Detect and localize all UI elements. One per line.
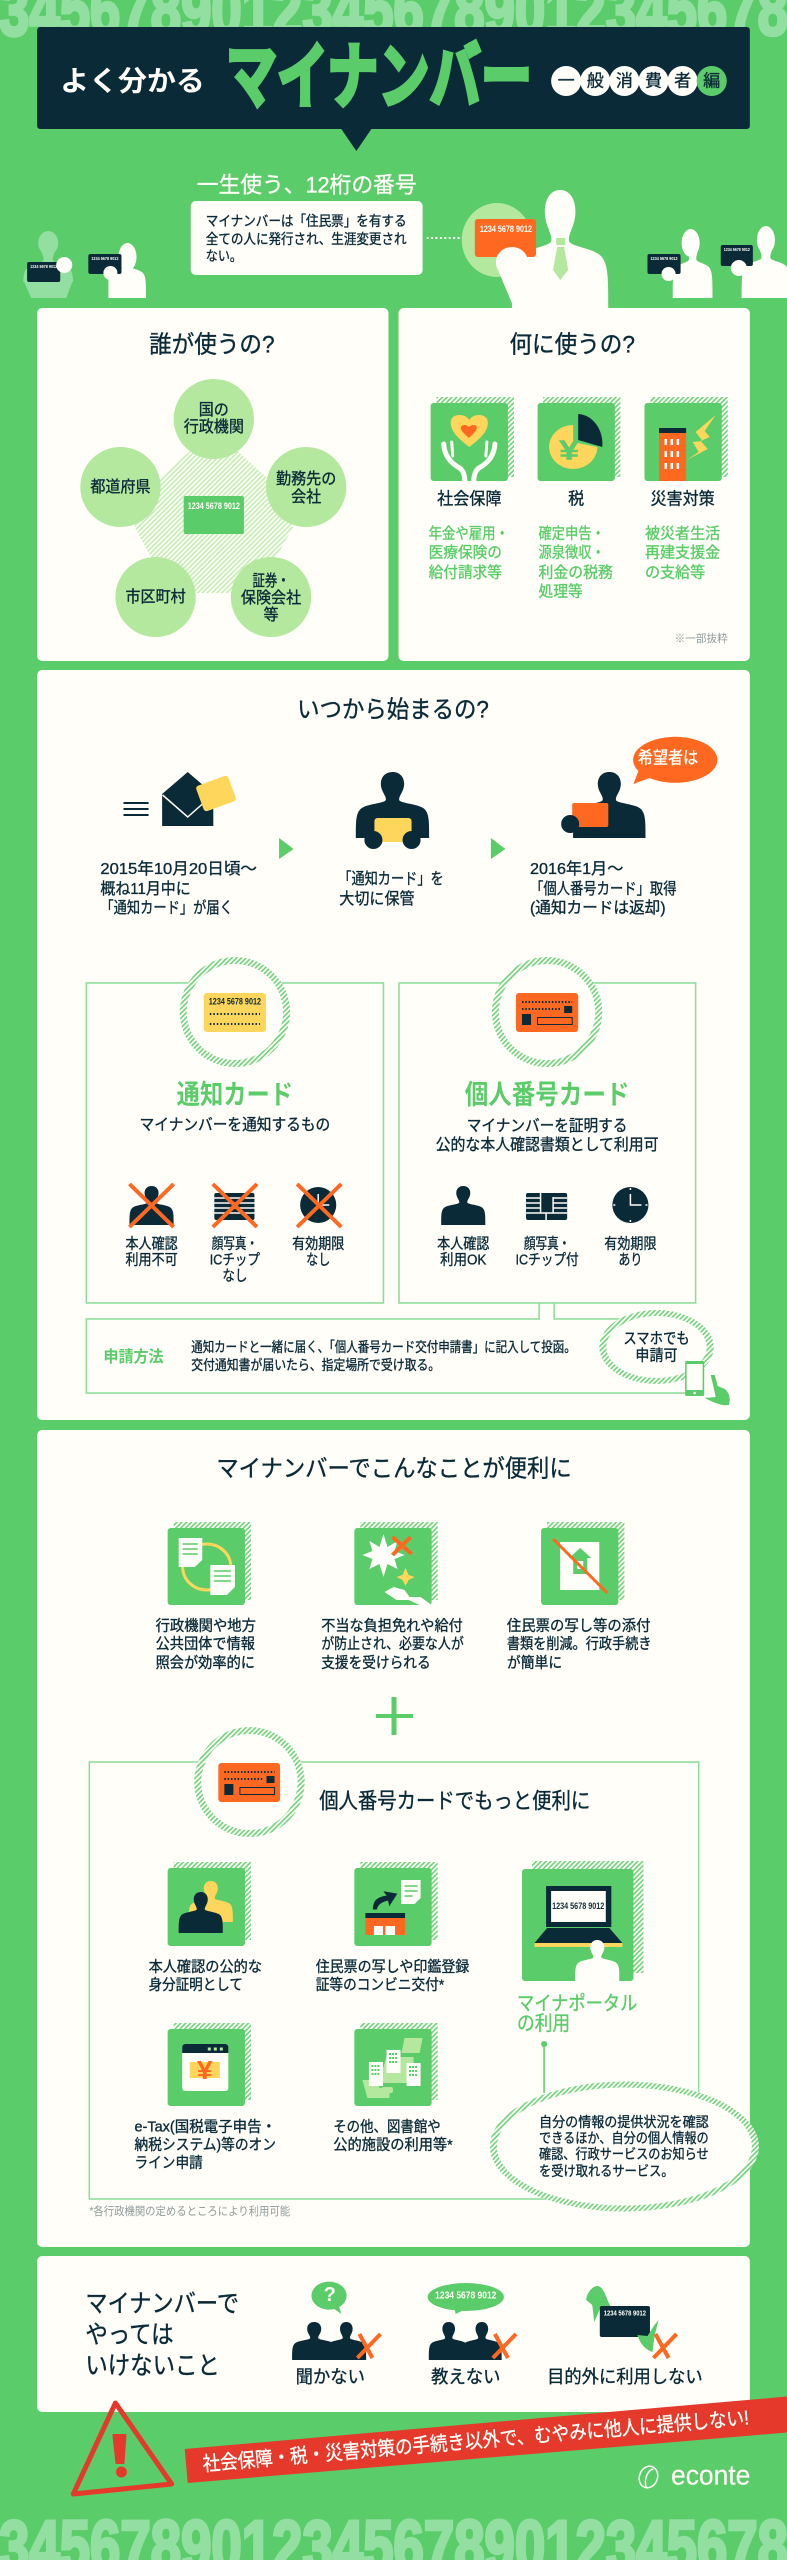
callout: smartphone: 申請可	[635, 1347, 678, 1364]
step 1 text: 概ね11月中に	[100, 880, 191, 898]
person right 1: 1234 5678 9012	[650, 256, 678, 262]
text: identity proof: 身分証明として	[149, 1977, 243, 1993]
callout: portal explanation: できるほか、自分の個人情報の	[539, 2130, 709, 2146]
heading: my number card: 個人番号カード	[465, 1080, 629, 1110]
labels: my number card features: ICチップ付	[515, 1252, 579, 1268]
panel: what for	[399, 308, 750, 661]
labels: notification card features: 利用不可	[125, 1252, 178, 1268]
text: identity proof	[149, 1959, 262, 1993]
labels: notification card features	[125, 1236, 344, 1284]
icon: tax	[538, 397, 620, 481]
icon: do not misuse: 1234 5678 9012	[604, 2311, 646, 2317]
panel: my number card	[399, 957, 696, 1303]
circle: national agencies	[174, 379, 254, 459]
icon: do not tell: 1234 5678 9012	[435, 2291, 497, 2301]
heading: when: いつから始まるの?	[297, 697, 489, 723]
circle: national agencies: 国の	[199, 401, 229, 419]
heading: portal	[517, 1992, 637, 2035]
text: benefit 3: が簡単に	[507, 1654, 562, 1671]
circle: securities and insurance	[231, 557, 311, 637]
icon: convenience store	[354, 1862, 438, 1946]
step 3 text: 2016年1月〜	[530, 860, 623, 878]
icon: e-tax: ¥	[197, 2055, 213, 2085]
callout: portal explanation	[490, 2082, 759, 2212]
step 3 text: (通知カードは返却)	[530, 899, 666, 917]
labels: usage categories: 災害対策	[650, 490, 715, 508]
heading: portal: の利用	[517, 2012, 570, 2035]
labels: notification card features: なし	[222, 1268, 247, 1284]
icon: chip	[526, 1193, 567, 1220]
icon: identity	[441, 1186, 485, 1225]
text: benefit 2: が防止され、必要な人が	[321, 1636, 464, 1652]
circle: municipalities: 市区町村	[125, 588, 186, 606]
audience badges: 一	[558, 72, 575, 90]
heading: who uses: 誰が使うの?	[149, 332, 275, 358]
logo: econte: econte	[671, 2460, 750, 2490]
text: benefit 2: 支援を受けられる	[321, 1655, 431, 1671]
icon: orange card	[218, 1763, 280, 1802]
icon: no expiry	[297, 1184, 341, 1227]
text: benefit 2: 不当な負担免れや給付	[321, 1618, 463, 1634]
text: application method: 通知カードと一緒に届く、「個人番号カード交付申請書」に記入して投函。	[191, 1339, 576, 1355]
circle: employer: 会社	[291, 488, 321, 506]
center card	[184, 496, 244, 534]
logo: econte	[636, 2460, 750, 2490]
note: excerpt: ※一部抜粋	[675, 631, 728, 645]
labels: my number card features: 顔写真・	[524, 1236, 570, 1252]
step 2 text: 「通知カード」を	[338, 870, 444, 888]
footnote: *各行政機関の定めるところにより利用可能	[89, 2204, 291, 2218]
audience badges: 般	[587, 72, 604, 90]
title main text: マイナンバー	[226, 38, 532, 118]
icon: identity proof	[168, 1862, 251, 1946]
center card: 1234 5678 9012	[188, 501, 240, 511]
text: benefit 2	[321, 1618, 464, 1671]
text: library and facilities	[333, 2119, 453, 2153]
heading: do not	[85, 2290, 239, 2380]
text: my number card purpose	[436, 1117, 659, 1154]
panel: card benefits frame	[89, 1727, 759, 2212]
heading: benefits: マイナンバーでこんなことが便利に	[216, 1456, 572, 1482]
text: e-Tax	[135, 2119, 276, 2171]
text: benefit 1: 行政機関や地方	[156, 1618, 256, 1634]
person right 2	[721, 226, 787, 298]
text: application method	[191, 1339, 576, 1373]
speech bubble: applicants: 希望者は	[638, 749, 698, 767]
intro text box: ない。	[206, 248, 242, 264]
labels: notification card features: 顔写真・	[212, 1236, 258, 1252]
text: convenience store copies: 証等のコンビニ交付*	[316, 1976, 444, 1993]
panel: when does it start	[37, 670, 750, 1420]
arrow	[279, 838, 294, 859]
intro text box: 全ての人に発行され、生涯変更され	[206, 231, 407, 247]
labels: notification card features: 本人確認	[125, 1236, 178, 1252]
labels: usage categories: 社会保障	[437, 490, 501, 508]
icon: phone and hand	[685, 1361, 730, 1405]
heading: do not: いけないこと	[85, 2352, 220, 2380]
step 2 text: 大切に保管	[339, 890, 415, 908]
panel: application method	[86, 1303, 730, 1405]
text: disaster details: 被災者生活	[645, 525, 720, 542]
text: notification card purpose: マイナンバーを通知するもの	[140, 1116, 330, 1134]
callout: portal explanation: 自分の情報の提供状況を確認	[539, 2114, 709, 2130]
title lead text: よく分かる	[60, 66, 205, 96]
text: tax details: 確定申告・	[539, 525, 605, 542]
circle: securities and insurance: 証券・	[252, 572, 290, 590]
text: my number card purpose: 公的な本人確認書類として利用可	[436, 1136, 659, 1154]
panel: do not	[37, 2256, 750, 2412]
heading: portal: マイナポータル	[517, 1992, 637, 2015]
labels: notification card features: 有効期限	[292, 1236, 344, 1252]
label: do not tell: 教えない	[431, 2367, 500, 2387]
text: social security details: 年金や雇用・	[429, 525, 509, 542]
icon: person holding card	[356, 772, 429, 849]
text: tax details: 利金の税務	[539, 564, 613, 581]
text: e-Tax: e-Tax(国税電子申告・	[135, 2119, 276, 2135]
heading: do not: マイナンバーで	[85, 2290, 239, 2318]
text: social security details: 給付請求等	[429, 564, 502, 581]
intro text box: マイナンバーは「住民票」を有する	[206, 213, 407, 229]
circle: prefectures: 都道府県	[90, 478, 151, 496]
text: application method: 交付通知書が届いたら、指定場所で受け取る。	[191, 1357, 440, 1373]
hatched ring	[492, 957, 602, 1067]
label: do not misuse: 目的外に利用しない	[547, 2367, 703, 2387]
step 2 text	[338, 870, 444, 908]
text: disaster details: の支給等	[645, 564, 705, 581]
icon: social security	[431, 397, 514, 481]
person left	[88, 243, 146, 298]
label: do not ask: 聞かない	[296, 2367, 365, 2387]
panel: notification card	[86, 957, 383, 1303]
circle: securities and insurance: 等	[264, 606, 279, 624]
circle: municipalities	[115, 557, 196, 637]
text: convenience store copies: 住民票の写しや印鑑登録	[316, 1959, 469, 1975]
text: tax details: 源泉徴収・	[539, 544, 605, 561]
icon: yellow card: 1234 5678 9012	[209, 997, 261, 1007]
person right 1	[647, 229, 713, 298]
circle: employer	[266, 447, 346, 527]
icon: do not ask	[292, 2282, 380, 2360]
circle: prefectures	[80, 447, 161, 527]
text: benefit 3: 住民票の写し等の添付	[507, 1617, 650, 1634]
text: e-Tax: ライン申請	[135, 2155, 203, 2171]
icon: envelope	[123, 772, 237, 826]
text: e-Tax: 納税システム)等のオン	[135, 2136, 276, 2153]
labels: my number card features: 利用OK	[440, 1252, 486, 1268]
text: tax details	[539, 525, 613, 600]
labels: my number card features: あり	[618, 1252, 642, 1268]
speech bubble: applicants	[633, 737, 717, 784]
dotted connector	[427, 237, 473, 239]
text: my number card purpose: マイナンバーを証明する	[467, 1117, 627, 1135]
labels: usage categories: 税	[568, 490, 584, 508]
icon: portal laptop	[522, 1861, 643, 1981]
person left faded: 1234 5678 9012	[30, 264, 57, 270]
text: benefit 1	[156, 1618, 256, 1671]
person left faded	[20, 231, 76, 298]
intro heading: 一生使う、12桁の番号	[197, 173, 417, 197]
icon: clock	[612, 1187, 648, 1223]
hatched ring	[194, 1727, 305, 1837]
hatched pentagon	[135, 430, 293, 593]
labels: notification card features: ICチップ	[210, 1252, 260, 1268]
icon: portal laptop: 1234 5678 9012	[552, 1901, 604, 1911]
text: library and facilities: 公的施設の利用等*	[333, 2136, 453, 2153]
audience badges: 編	[703, 72, 720, 90]
heading: what for: 何に使うの?	[509, 332, 635, 358]
labels: my number card features: 本人確認	[437, 1236, 489, 1252]
text: benefit 1: 公共団体で情報	[156, 1636, 255, 1652]
icon: tax: ¥	[559, 435, 580, 465]
arrow	[491, 838, 505, 859]
callout: portal explanation: 確認、行政サービスのお知らせ	[539, 2146, 709, 2162]
text: social security details: 医療保険の	[429, 544, 502, 561]
labels: my number card features: 有効期限	[604, 1236, 657, 1252]
labels: my number card features	[437, 1236, 657, 1268]
text: benefit 1: 照会が効率的に	[156, 1655, 255, 1671]
icon: plus	[376, 1697, 413, 1735]
labels: notification card features: なし	[306, 1252, 330, 1268]
main person with card: 1234 5678 9012	[480, 224, 532, 234]
heading: do not: やっては	[85, 2321, 174, 2349]
icon: no identity	[129, 1184, 174, 1227]
text: social security details	[429, 525, 509, 581]
icon: yellow card	[204, 993, 266, 1032]
icon: public facilities	[354, 2023, 438, 2106]
icon: person with orange card	[561, 772, 646, 838]
text: identity proof: 本人確認の公的な	[149, 1959, 262, 1975]
text: benefit 3	[507, 1617, 651, 1671]
text: disaster details	[645, 525, 720, 581]
heading: notification card: 通知カード	[177, 1080, 293, 1110]
icon: do not misuse	[586, 2286, 677, 2358]
audience badges: 費	[645, 72, 662, 90]
circle: employer: 勤務先の	[276, 470, 336, 488]
panel: who uses	[37, 308, 388, 661]
main person with card	[462, 190, 608, 310]
icon: e-tax	[168, 2023, 251, 2106]
intro text box	[191, 201, 423, 275]
person right 2: 1234 5678 9012	[724, 247, 750, 253]
text: benefit 3: 書類を削減。行政手続き	[507, 1636, 651, 1652]
icon: orange card	[516, 993, 578, 1032]
circle: securities and insurance: 保険会社	[241, 589, 301, 607]
title banner	[37, 27, 750, 151]
heading: card benefits: 個人番号カードでもっと便利に	[319, 1789, 590, 1813]
icon: fraud prevention	[354, 1522, 438, 1605]
circle: national agencies: 行政機関	[184, 418, 244, 436]
audience badges	[551, 66, 727, 96]
callout: portal explanation: を受け取れるサービス。	[539, 2163, 674, 2179]
step 1 text	[100, 860, 257, 917]
step 3 text: 「個人番号カード」取得	[530, 880, 677, 898]
callout: smartphone: スマホでも	[623, 1330, 690, 1347]
person left: 1234 5678 9012	[91, 256, 119, 262]
hatched ring	[180, 957, 290, 1067]
text: library and facilities: その他、図書館や	[333, 2119, 441, 2135]
audience badges: 消	[616, 72, 633, 90]
text: convenience store copies	[316, 1959, 469, 1993]
labels: usage categories	[437, 490, 715, 508]
audience badges: 者	[674, 72, 691, 90]
step 1 text: 2015年10月20日頃〜	[100, 860, 257, 878]
step 3 text	[530, 860, 677, 917]
connector: portal	[543, 2044, 545, 2093]
icon: no chip	[213, 1184, 257, 1227]
text: tax details: 処理等	[539, 583, 583, 600]
icon: do not tell	[428, 2283, 516, 2360]
icon: do not ask: ?	[324, 2284, 336, 2306]
step 1 text: 「通知カード」が届く	[100, 899, 233, 917]
icon: fewer documents	[541, 1522, 624, 1605]
text: disaster details: 再建支援金	[645, 544, 720, 561]
icon: warning triangle	[73, 2403, 172, 2494]
panel: benefits	[37, 1430, 759, 2247]
icon: document exchange	[168, 1522, 251, 1605]
label: application: 申請方法	[103, 1347, 164, 1366]
icon: disaster	[644, 397, 728, 481]
callout: smartphone	[599, 1310, 714, 1384]
